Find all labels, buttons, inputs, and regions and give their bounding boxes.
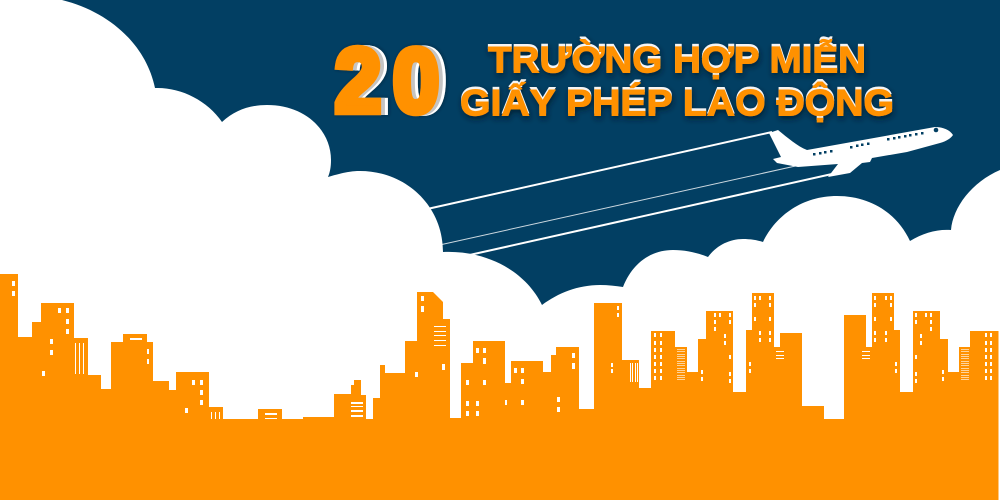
city skyline — [0, 274, 998, 500]
big number 20: 2 — [342, 32, 388, 132]
heading line 1: TRƯỜNG HỢP MIỄN — [488, 36, 866, 78]
heading line 2: GIẤY PHÉP LAO ĐỘNG — [460, 82, 894, 124]
big number 20: 2 — [335, 32, 381, 132]
airplane — [769, 127, 953, 177]
heading line 1: TRƯỜNG HỢP MIỄN — [488, 38, 866, 80]
big number 20: 0 — [397, 32, 443, 132]
big number 20 — [335, 32, 446, 132]
building windows — [12, 281, 992, 419]
big number 20: 0 — [393, 32, 439, 132]
big number 20: 0 — [400, 32, 446, 132]
contrails — [425, 132, 832, 256]
big number 20: 2 — [339, 32, 385, 132]
title — [335, 32, 894, 132]
heading line 2: GIẤY PHÉP LAO ĐỘNG — [460, 79, 894, 121]
building silhouettes — [0, 274, 998, 500]
